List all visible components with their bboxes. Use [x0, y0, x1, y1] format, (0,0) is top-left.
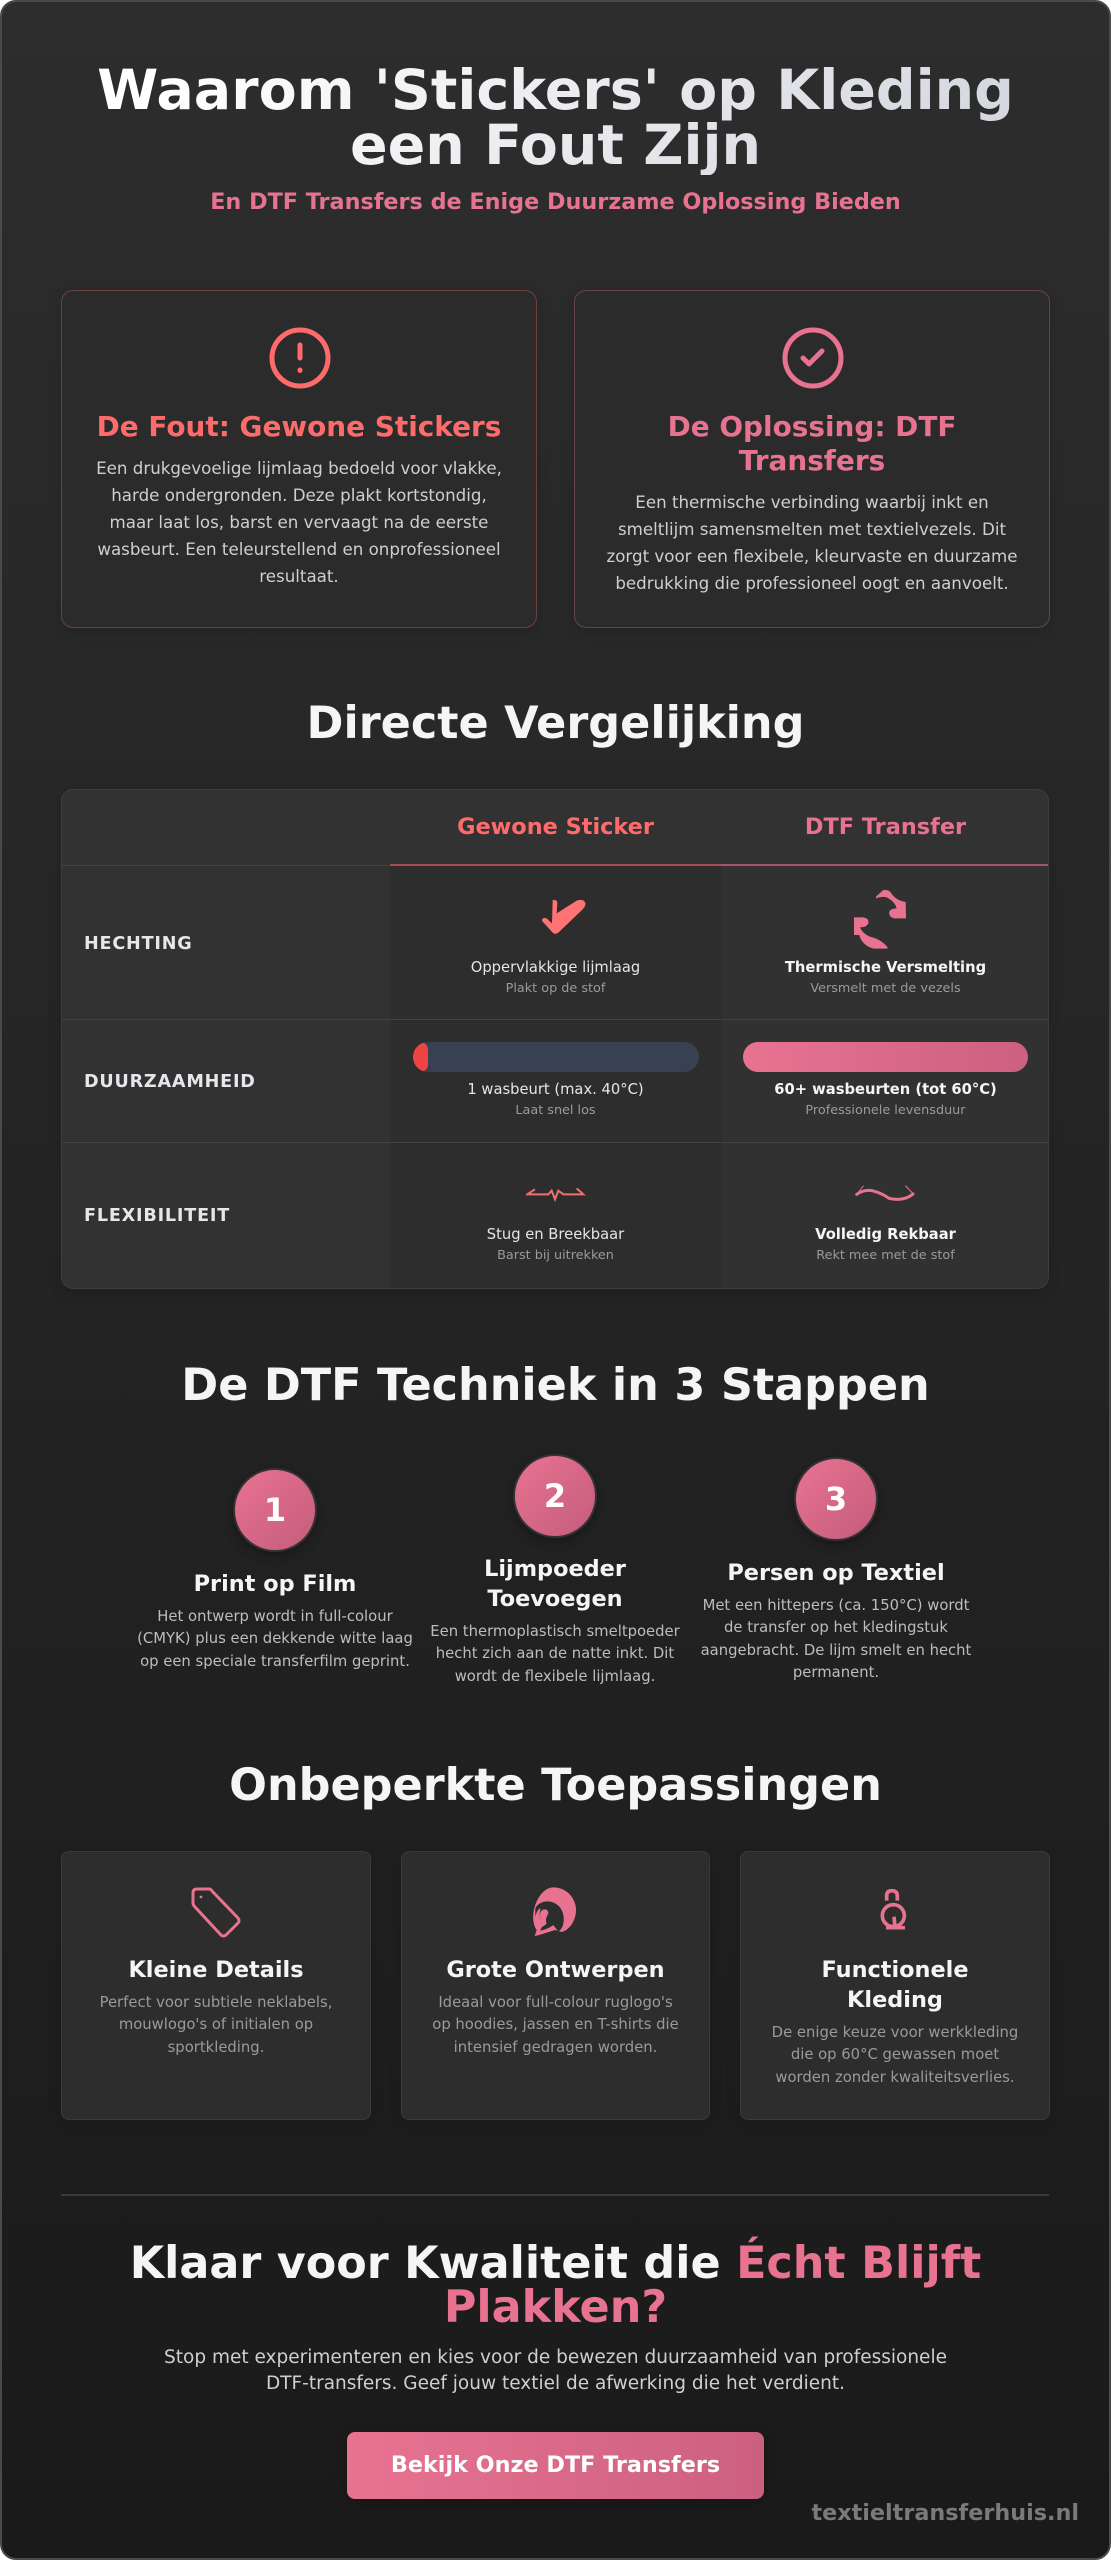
- step 1: [137, 1468, 413, 1670]
- cell: thermische versmelting: Thermische Versmelting: [785, 959, 986, 976]
- card description: [100, 1994, 332, 2056]
- panel: functionele kleding: [740, 1851, 1050, 2120]
- panel: kleine details: [61, 1851, 371, 2120]
- cta heading: Plakken?: [444, 2282, 667, 2332]
- description: resultaat.: [259, 567, 339, 586]
- cta text: [164, 2347, 947, 2394]
- icon: large print: [533, 1887, 576, 1936]
- step 3: [701, 1457, 971, 1681]
- card description: die op 60°C gewassen moet: [791, 2046, 999, 2063]
- step description: wordt de flexibele lijmlaag.: [455, 1668, 655, 1685]
- card description: [432, 1994, 679, 2056]
- cell: stug en breekbaar: [487, 1226, 624, 1263]
- panel: grote ontwerpen: [401, 1851, 710, 2120]
- step description: [430, 1623, 680, 1685]
- description: Een thermische verbinding waarbij inkt en: [635, 493, 989, 512]
- cell: 60+ wasbeurten: Professionele levensduur: [805, 1103, 966, 1118]
- watermark: textieltransferhuis.nl: [811, 2500, 1079, 2526]
- panel: de fout: [61, 290, 537, 628]
- icon: fusion arrows: [854, 890, 906, 949]
- description: smeltlijm samensmelten met textielvezels. Dit: [618, 520, 1006, 539]
- row label: hechting: HECHTING: [84, 934, 192, 954]
- bar fill: [413, 1042, 428, 1072]
- icon: sticker check: [542, 900, 586, 934]
- step description: de transfer op het kledingstuk: [724, 1619, 948, 1636]
- step description: hecht zich aan de natte inkt. Dit: [436, 1645, 674, 1662]
- number badge: 2: [544, 1477, 566, 1515]
- column header: dtf transfer: DTF Transfer: [805, 814, 966, 840]
- panel: de oplossing: [574, 290, 1050, 628]
- step description: permanent.: [793, 1664, 879, 1681]
- heading: onbeperkte toepassingen: Onbeperkte Toepassingen: [229, 1760, 882, 1811]
- step description: (CMYK) plus een dekkende witte laag: [137, 1630, 413, 1647]
- heading: de dtf techniek: De DTF Techniek in 3 Stappen: [181, 1360, 930, 1411]
- number badge: [233, 1468, 317, 1552]
- card description: intensief gedragen worden.: [454, 2039, 657, 2056]
- card title: [821, 1957, 969, 2013]
- cta text: Stop met experimenteren en kies voor de bewezen duurzaamheid van professionele: [164, 2347, 947, 2368]
- icon: lock: [880, 1888, 906, 1930]
- icon: rigid crack: [526, 1188, 586, 1202]
- description: Een drukgevoelige lijmlaag bedoeld voor vlakke,: [96, 459, 502, 478]
- card description: De enige keuze voor werkkleding: [772, 2024, 1018, 2041]
- cell: 1 wasbeurt: [467, 1081, 644, 1118]
- number badge: 3: [825, 1480, 847, 1518]
- subtitle: En DTF Transfers de Enige Duurzame Oplossing Bieden: [210, 189, 901, 215]
- step description: Het ontwerp wordt in full-colour: [157, 1608, 393, 1625]
- bar: sticker durability: [413, 1042, 699, 1072]
- card description: mouwlogo's of initialen op: [119, 2016, 313, 2033]
- step title: Lijmpoeder: [484, 1556, 626, 1582]
- cta heading: [130, 2236, 981, 2332]
- heading: directe vergelijking: Directe Vergelijking: [307, 698, 804, 749]
- cta heading: Klaar voor Kwaliteit die Écht Blijft: [130, 2238, 981, 2289]
- heading: [668, 410, 956, 477]
- cell: stug en breekbaar: Barst bij uitrekken: [497, 1248, 614, 1263]
- step description: aangebracht. De lijm smelt en hecht: [701, 1642, 971, 1659]
- step title: [484, 1556, 626, 1612]
- cell: oppervlakkige lijmlaag: Plakt op de stof: [506, 981, 605, 996]
- column tints: [62, 790, 390, 1288]
- divider: [61, 2194, 1049, 2196]
- step description: Met een hittepers (ca. 150°C) wordt: [703, 1597, 969, 1614]
- cta button: [347, 2432, 764, 2499]
- description: bedrukking die professioneel oogt en aanvoelt.: [615, 574, 1009, 593]
- card title: Kleine Details: [128, 1957, 304, 1983]
- cell: volledig rekbaar: [815, 1226, 956, 1263]
- step title: Persen op Textiel: [727, 1560, 945, 1586]
- card description: sportkleding.: [168, 2039, 264, 2056]
- number badge: [513, 1454, 597, 1538]
- cell: oppervlakkige lijmlaag: [471, 959, 640, 996]
- icon: check circle: [782, 328, 844, 388]
- cell: 60+ wasbeurten: 60+ wasbeurten (tot 60°C): [774, 1081, 997, 1098]
- step title: Print op Film: [194, 1571, 356, 1597]
- bar: dtf durability: [743, 1042, 1028, 1072]
- description: maar laat los, barst en vervaagt na de eerste: [110, 513, 488, 532]
- number badge: [794, 1457, 878, 1541]
- cell: thermische versmelting: Versmelt met de vezels: [810, 981, 961, 996]
- cta button: Bekijk Onze DTF Transfers: [391, 2452, 720, 2478]
- cell: 1 wasbeurt: Laat snel los: [515, 1103, 596, 1118]
- step description: [137, 1608, 413, 1670]
- card title: Kleding: [847, 1987, 943, 2013]
- step description: op een speciale transferfilm geprint.: [140, 1653, 410, 1670]
- title: [2, 63, 1109, 175]
- step 2: [430, 1454, 680, 1685]
- card title: Functionele: [821, 1957, 969, 1983]
- description: harde ondergronden. Deze plakt kortstondig,: [111, 486, 487, 505]
- number badge: 1: [264, 1491, 286, 1529]
- card description: Perfect voor subtiele neklabels,: [100, 1994, 332, 2011]
- card description: worden zonder kwaliteitsverlies.: [775, 2069, 1015, 2086]
- heading: De Fout: Gewone Stickers: [97, 410, 501, 443]
- description: [606, 493, 1018, 593]
- comparison table: [61, 789, 1049, 1289]
- description: [96, 459, 502, 586]
- cell: stug en breekbaar: Stug en Breekbaar: [487, 1226, 624, 1243]
- description: wasbeurt. Een teleurstellend en onprofessioneel: [97, 540, 501, 559]
- step description: [701, 1597, 971, 1681]
- description: zorgt voor een flexibele, kleurvaste en duurzame: [606, 547, 1018, 566]
- card title: Grote Ontwerpen: [446, 1957, 665, 1983]
- cell: volledig rekbaar: Rekt mee met de stof: [816, 1248, 955, 1263]
- row lines: [62, 865, 1048, 866]
- card description: [772, 2024, 1018, 2086]
- card description: Ideaal voor full-colour ruglogo's: [438, 1994, 673, 2011]
- step description: Een thermoplastisch smeltpoeder: [430, 1623, 680, 1640]
- cell: oppervlakkige lijmlaag: Oppervlakkige lijmlaag: [471, 959, 640, 976]
- icon: flexible wave: [855, 1186, 915, 1201]
- cell: thermische versmelting: [784, 959, 986, 996]
- row label: flexibiliteit: FLEXIBILITEIT: [84, 1206, 230, 1226]
- icon: warning circle: [270, 328, 330, 388]
- heading: De Oplossing: DTF: [668, 410, 956, 443]
- cta text: DTF-transfers. Geef jouw textiel de afwerking die het verdient.: [266, 2372, 845, 2394]
- heading: Transfers: [739, 444, 885, 477]
- title: een Fout Zijn: [350, 113, 761, 178]
- row label: duurzaamheid: DUURZAAMHEID: [84, 1072, 256, 1092]
- cell: 60+ wasbeurten: [774, 1081, 997, 1118]
- cell: 1 wasbeurt: 1 wasbeurt (max. 40°C): [467, 1081, 644, 1098]
- step title: Toevoegen: [487, 1586, 623, 1612]
- column header: gewone sticker: Gewone Sticker: [457, 814, 654, 840]
- title: Waarom 'Stickers' op Kleding: [97, 58, 1014, 123]
- card description: op hoodies, jassen en T-shirts die: [432, 2016, 679, 2033]
- cell: volledig rekbaar: Volledig Rekbaar: [815, 1226, 956, 1243]
- icon: tag: [192, 1888, 240, 1938]
